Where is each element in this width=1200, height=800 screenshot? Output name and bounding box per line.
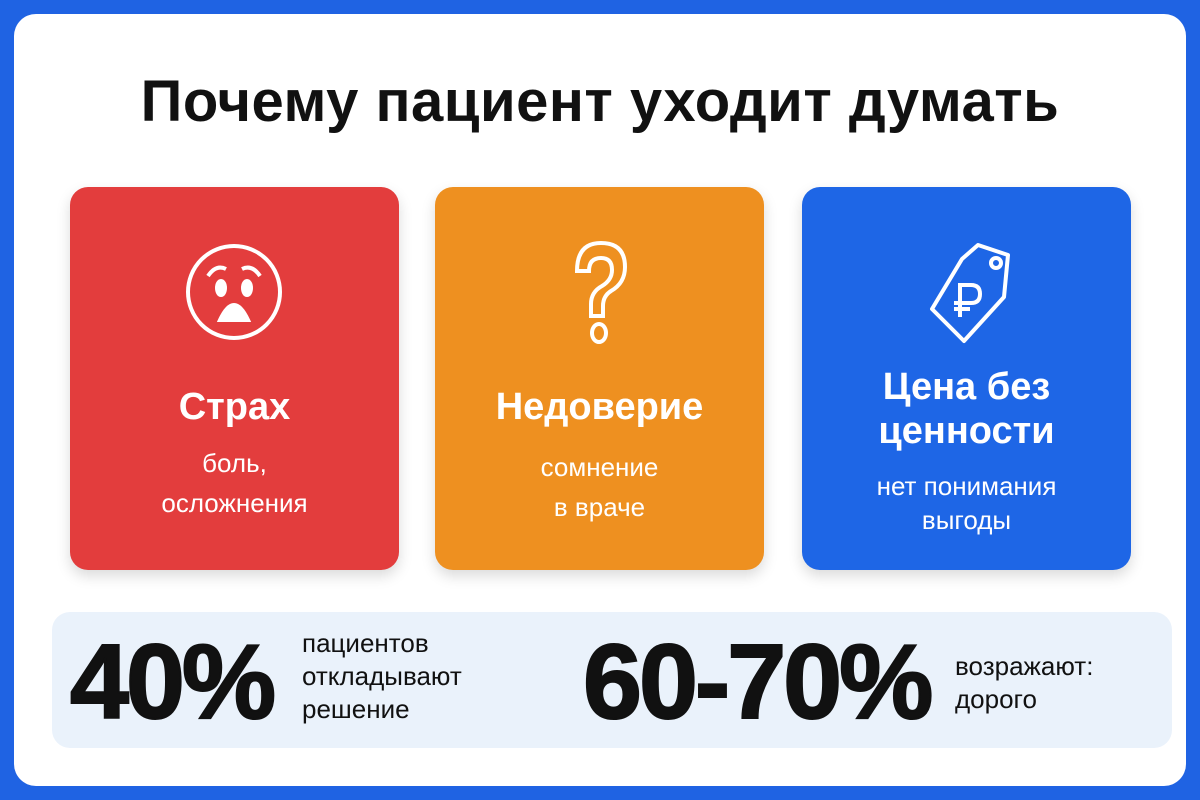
subtitle: сомнение <box>541 452 658 482</box>
stat text <box>302 628 462 724</box>
subtitle <box>161 448 308 518</box>
icon: scared face <box>186 244 282 340</box>
heading: Страх <box>179 386 290 428</box>
subtitle: выгоды <box>922 505 1011 535</box>
card: fear <box>70 187 399 570</box>
subtitle <box>877 471 1056 535</box>
stat text <box>955 651 1093 714</box>
heading: Цена без <box>883 366 1050 408</box>
icon: question mark <box>575 241 627 344</box>
subtitle: осложнения <box>161 488 308 518</box>
icon: ruble price tag <box>930 243 1010 344</box>
card: price <box>802 187 1131 570</box>
stat text: решение <box>302 694 410 724</box>
card: distrust <box>435 187 764 570</box>
stat 60-70%: 60-70% <box>583 623 930 741</box>
heading: Недоверие <box>496 386 703 428</box>
stat text: дорого <box>955 684 1037 714</box>
stat text: откладывают <box>302 661 462 691</box>
subtitle <box>541 452 658 522</box>
stat text: пациентов <box>302 628 429 658</box>
heading: ценности <box>878 410 1055 452</box>
subtitle: боль, <box>202 448 267 478</box>
subtitle: нет понимания <box>877 471 1056 501</box>
stat text: возражают: <box>955 651 1093 681</box>
title: Почему пациент уходит думать <box>141 69 1059 134</box>
stats panel <box>52 612 1172 748</box>
heading <box>878 366 1055 452</box>
subtitle: в враче <box>554 492 645 522</box>
stat 40%: 40% <box>70 623 273 741</box>
